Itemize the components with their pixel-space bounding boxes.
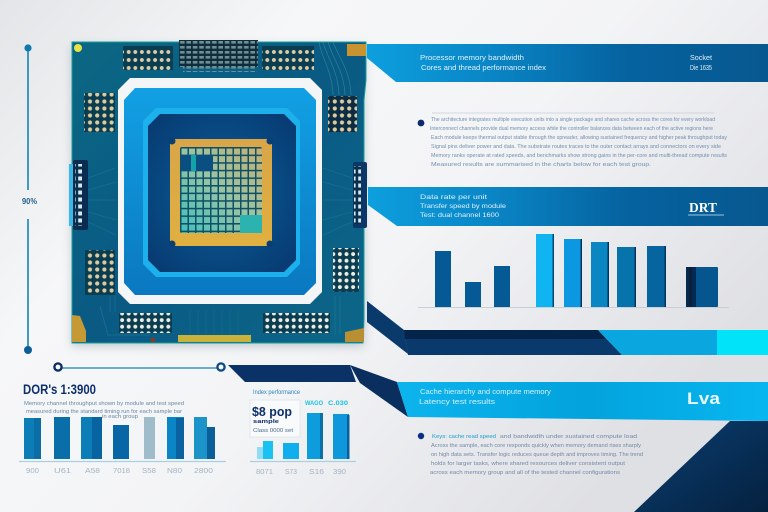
banner 1: Cores and thread performance index [421,65,547,72]
chart description: measured during the standard timing run for each sample bar [26,409,182,415]
callout box: $8 pop [252,405,292,419]
text block 1: Memory ranks operate at rated speeds, and benchmarks show strong gains in the per-core and multi-thread compute results [431,153,727,159]
text block 1: The architecture integrates multiple execution units into a single package and shares cache across the cores for every workload [431,117,715,123]
pin grid: left lower [85,250,115,295]
scale line with label [22,44,37,354]
lower-right navy wedge [634,421,768,512]
banner 2: Transfer speed by module [420,203,506,210]
heat spreader frame [118,78,322,304]
text block 1: Signal pins deliver power and data. The substrate routes traces to the outer contact arrays and connectors on every side [431,144,721,150]
axis labels: 900 [26,468,39,475]
pin grid: top centre [179,40,258,72]
gold die [168,138,274,248]
text block 1 [418,113,727,168]
chart description: in each group [102,414,138,420]
banner 1: Processor memory bandwidth [420,55,524,62]
corner pads [72,44,366,342]
text block 3: across each memory group and all of the tested channel configurations [430,470,620,476]
text block 3: and bandwidth under sustained compute load [500,434,637,440]
pin grid: left upper [84,93,115,132]
banner 2 [368,187,768,226]
axis labels: 2800 [194,468,213,475]
series labels [305,401,349,407]
callout box: Index performance [253,390,301,396]
banner 2: Test: dual channel 1600 [420,212,499,219]
top navy ribbon [228,365,408,417]
series labels: C.030 [328,401,349,407]
text block 3: on high data sets. Transfer logic reduces queue depth and improves timing. The trend [431,452,643,458]
processor board [69,40,367,346]
axis labels: S16 [309,469,324,476]
text block 1: Measured results are summarised in the charts below for each test group. [431,162,652,168]
text block 3: Across the sample, each core responds quickly when memory demand rises sharply [431,443,641,449]
text block 3 [418,433,643,476]
pin grid: top left [123,46,173,70]
axis labels: S58 [142,468,156,475]
dark inner package [148,114,296,272]
text block 3: Keys: cache read speed [432,434,496,440]
axis labels: 390 [333,469,346,476]
axis labels: S73 [285,469,297,476]
left connector [69,160,88,230]
callout box [250,390,301,437]
banner 3: Latency test results [419,399,496,406]
text block 1: Interconnect channels provide dual memory access while the controller balances data between each of the active regions here [430,126,713,132]
callout box: sample [253,419,279,425]
axis labels: 8071 [256,469,273,476]
axis labels: U61 [54,468,71,475]
text block 3: holds for larger tasks, where shared resources deliver consistent output [431,461,625,467]
pin grid: right lower [333,248,359,292]
axis labels [26,468,213,475]
bars [24,417,215,459]
banner 2: DRT [689,201,718,216]
pin grid: top right [262,46,314,70]
axis labels: 7018 [113,468,130,475]
circuit traces [88,42,352,335]
inner ring [143,108,300,277]
right connector [353,162,367,228]
middle lower chart panel [250,390,356,476]
axis labels [256,469,346,476]
pin grid: right upper [328,96,357,132]
scale line with label: 90% [22,196,37,206]
axis labels: A58 [85,468,100,475]
bars [257,413,350,459]
chart description [24,401,184,420]
pin grid: bottom right [263,313,330,333]
left lower chart panel [19,382,226,475]
banner 3 [397,382,768,421]
banner 1: Die 1635 [690,65,712,72]
banner 3: Lva [687,389,721,408]
pin grid: bottom left [119,313,172,333]
dark and cyan stripe [367,301,768,355]
banner 2: Data rate per unit [420,194,487,201]
blue die carrier [124,88,316,295]
axis labels: N80 [167,468,182,475]
bar chart: main [418,234,729,308]
chart heading: DOR's 1:3900 [23,382,96,397]
banner 1: Socket [690,55,712,62]
text block 1: Each module keeps thermal output stable through the spreader, allowing sustained frequency and higher peak throughput today [431,135,727,141]
banner 1 [367,44,768,82]
series labels: WAGO [305,401,323,407]
circuit board substrate [72,42,366,343]
banner 3: Cache hierarchy and compute memory [420,389,552,396]
silicon cell grid [180,147,262,233]
callout box: Class 0000 set [253,428,294,434]
chart description: Memory channel throughput shown by module and test speed [24,401,184,407]
timeline connector [54,363,225,371]
